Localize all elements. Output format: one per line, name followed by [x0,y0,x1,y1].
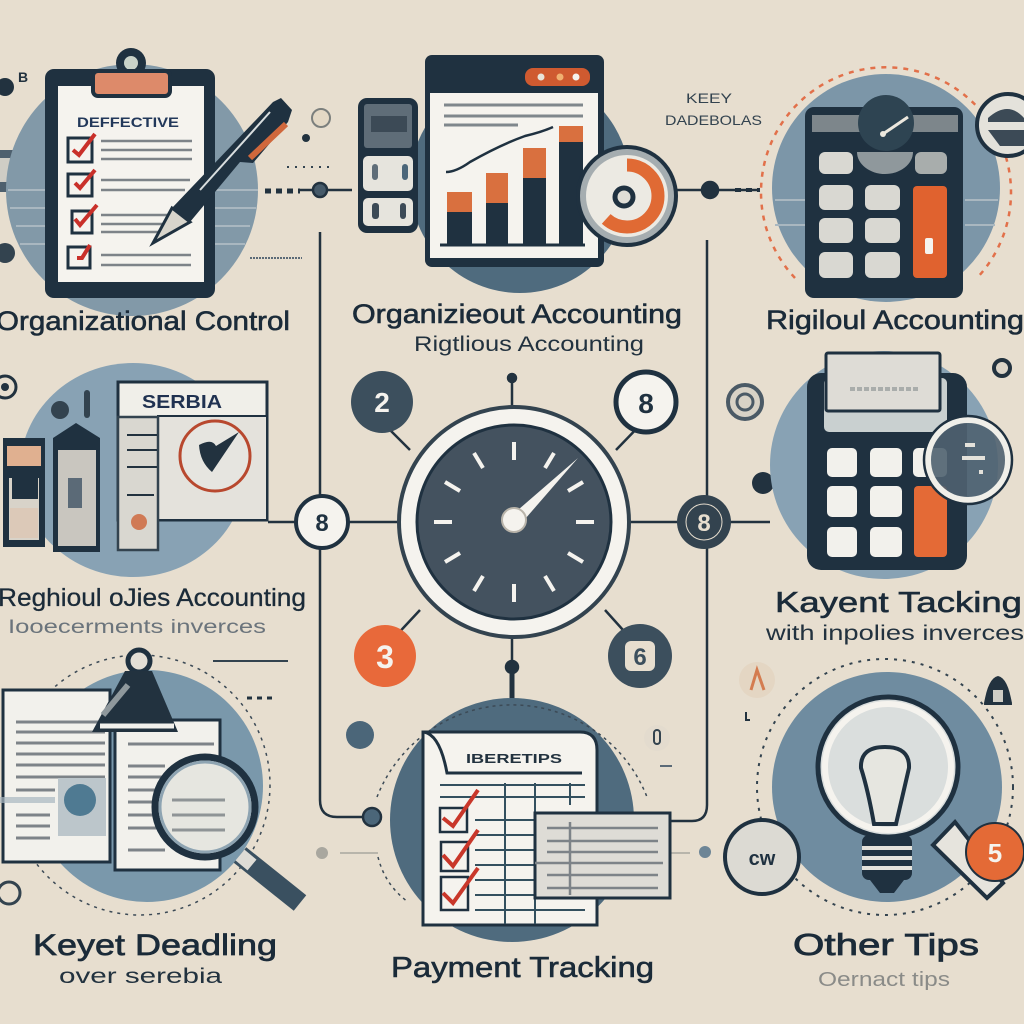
panel: accounting report chart [358,55,678,293]
node 2 [351,371,413,433]
node 2: 2 [374,387,390,418]
heading: other tips: Oernact tips [818,969,950,991]
window badge [525,68,590,86]
node 8 left: 8 [315,510,329,537]
icon: pen [153,98,292,243]
panel: other tips lightbulb [725,659,1024,915]
small icons above folders [51,390,90,419]
report text lines [444,105,583,125]
numbered nodes [296,371,731,688]
node 8 right [677,495,731,549]
checkmarks [440,790,478,910]
heading: organizational accounting: Organizieout Accounting [352,299,682,329]
small scattered icons: B [18,69,28,85]
sheet heading: IBERETIPS [466,751,562,766]
central clock [399,407,629,637]
calculator keys [819,152,947,278]
icon: gear badge [725,820,799,894]
icon: folders [3,423,100,552]
heading: other tips [793,927,979,991]
heading: regional accounting: Iooecerments inverces [8,617,266,638]
icon: light bulb [818,697,958,893]
node 3: 3 [376,639,394,675]
node 8 left [296,496,348,548]
heading: rigorous accounting: Rigiloul Accounting [766,305,1024,335]
heading: organizational accounting [352,299,682,356]
icon: approval check [180,421,250,491]
panel: organizational control checklist [6,48,292,316]
panel: payment spreadsheet [377,698,670,942]
panel: magnifier documents [0,650,300,915]
icon: magnifying glass [155,757,300,903]
node 8 top right: 8 [638,388,654,419]
heading: other tips: Other Tips [793,927,979,962]
panel: calculator right [770,351,1012,579]
label: key deadlines [665,90,762,128]
document with approval [118,382,267,550]
heading: payment tracking: with inpolies inverces [765,622,1024,645]
icon: tag badge [933,822,1024,898]
node 8 right: 8 [697,510,711,537]
calculator keys [827,448,947,557]
icon: magnifier [924,416,1012,504]
node 3 [354,625,416,687]
checklist rows [68,134,192,268]
icon: clipboard clip [93,48,170,96]
panel: serbia documents [3,363,267,577]
panel: calculator top right [761,67,1024,302]
connector lines [265,182,770,853]
icon: desk lamp [92,650,178,732]
heading: key deadlines: over serebia [59,965,222,988]
clock hand [502,458,578,532]
heading: regional accounting: Reghioul oJies Accounting [0,584,306,612]
bar chart [440,126,585,245]
heading: organizational control: Organizational Control [0,306,290,336]
icon: side keypad [358,98,418,233]
node 6 [608,624,672,688]
label: key deadlines: DADEBOLAS [665,112,762,128]
node 8 top right [616,372,676,432]
heading: regional accounting [0,584,306,638]
icon: gear badge: cw [749,848,776,870]
heading: key deadlines: Keyet Deadling [33,929,277,962]
icon: gauge magnifier [576,145,678,247]
label: key deadlines: KEEY [686,90,733,106]
sheet grid [440,783,585,924]
node 6: 6 [633,644,647,671]
icon: seal badge [977,94,1024,156]
document heading: SERBIA [142,392,222,412]
heading: key deadlines [33,929,277,988]
heading: organizational accounting: Rigtlious Accounting [414,333,644,356]
heading: payment tracking [765,587,1024,645]
heading: payment tracking: Kayent Tacking [775,587,1022,619]
heading: payment tracking: Payment Tracking [391,952,654,984]
icon: tag badge: 5 [988,838,1002,868]
checklist heading: DEFFECTIVE [77,114,179,130]
icon: dial dome [858,95,914,151]
overlay table [535,813,670,898]
clock ticks [434,442,594,602]
